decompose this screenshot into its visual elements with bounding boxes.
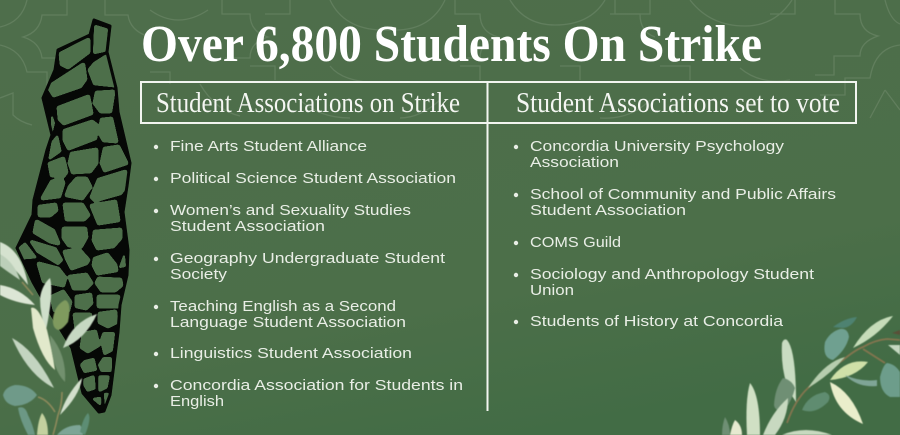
list: associations set to vote: Students of History at Concordia <box>530 313 784 330</box>
map: cell mosaic silhouette <box>17 20 130 412</box>
background ornament pattern <box>0 0 900 125</box>
list: associations set to vote: Sociology and Anthropology Student <box>530 266 815 283</box>
list: associations on strike: Geography Undergraduate Student <box>170 250 446 267</box>
list: associations on strike: Political Science Student Association <box>170 170 456 187</box>
olive branch: bottom right <box>722 316 900 435</box>
list: associations on strike: Concordia Association for Students in <box>170 377 463 394</box>
list: associations on strike: Linguistics Student Association <box>170 345 412 362</box>
list: associations set to vote: Concordia University Psychology <box>530 138 785 155</box>
list: associations set to vote: Association <box>530 154 619 171</box>
heading: associations set to vote: Student Associations set to vote <box>516 88 840 119</box>
list: associations set to vote: Student Association <box>530 202 686 219</box>
list: associations on strike: Women’s and Sexuality Studies <box>170 202 411 219</box>
title: Over 6,800 Students On Strike <box>141 16 762 73</box>
list: associations on strike <box>154 138 463 410</box>
list: associations set to vote: School of Community and Public Affairs <box>530 186 836 203</box>
list: associations on strike: English <box>170 393 224 410</box>
list: associations on strike: Teaching English as a Second <box>170 298 396 315</box>
list: associations on strike: Society <box>170 266 228 283</box>
list: associations on strike: Fine Arts Student Alliance <box>170 138 367 155</box>
heading: associations on strike: Student Associations on Strike <box>156 88 460 119</box>
list: associations on strike: Student Association <box>170 218 325 235</box>
list: associations on strike: Language Student Association <box>170 314 406 331</box>
olive branch: bottom left <box>0 242 97 435</box>
list: associations set to vote: Union <box>530 282 574 299</box>
list: associations set to vote: COMS Guild <box>530 234 621 251</box>
list: associations set to vote <box>514 138 836 330</box>
table frame <box>141 82 856 411</box>
